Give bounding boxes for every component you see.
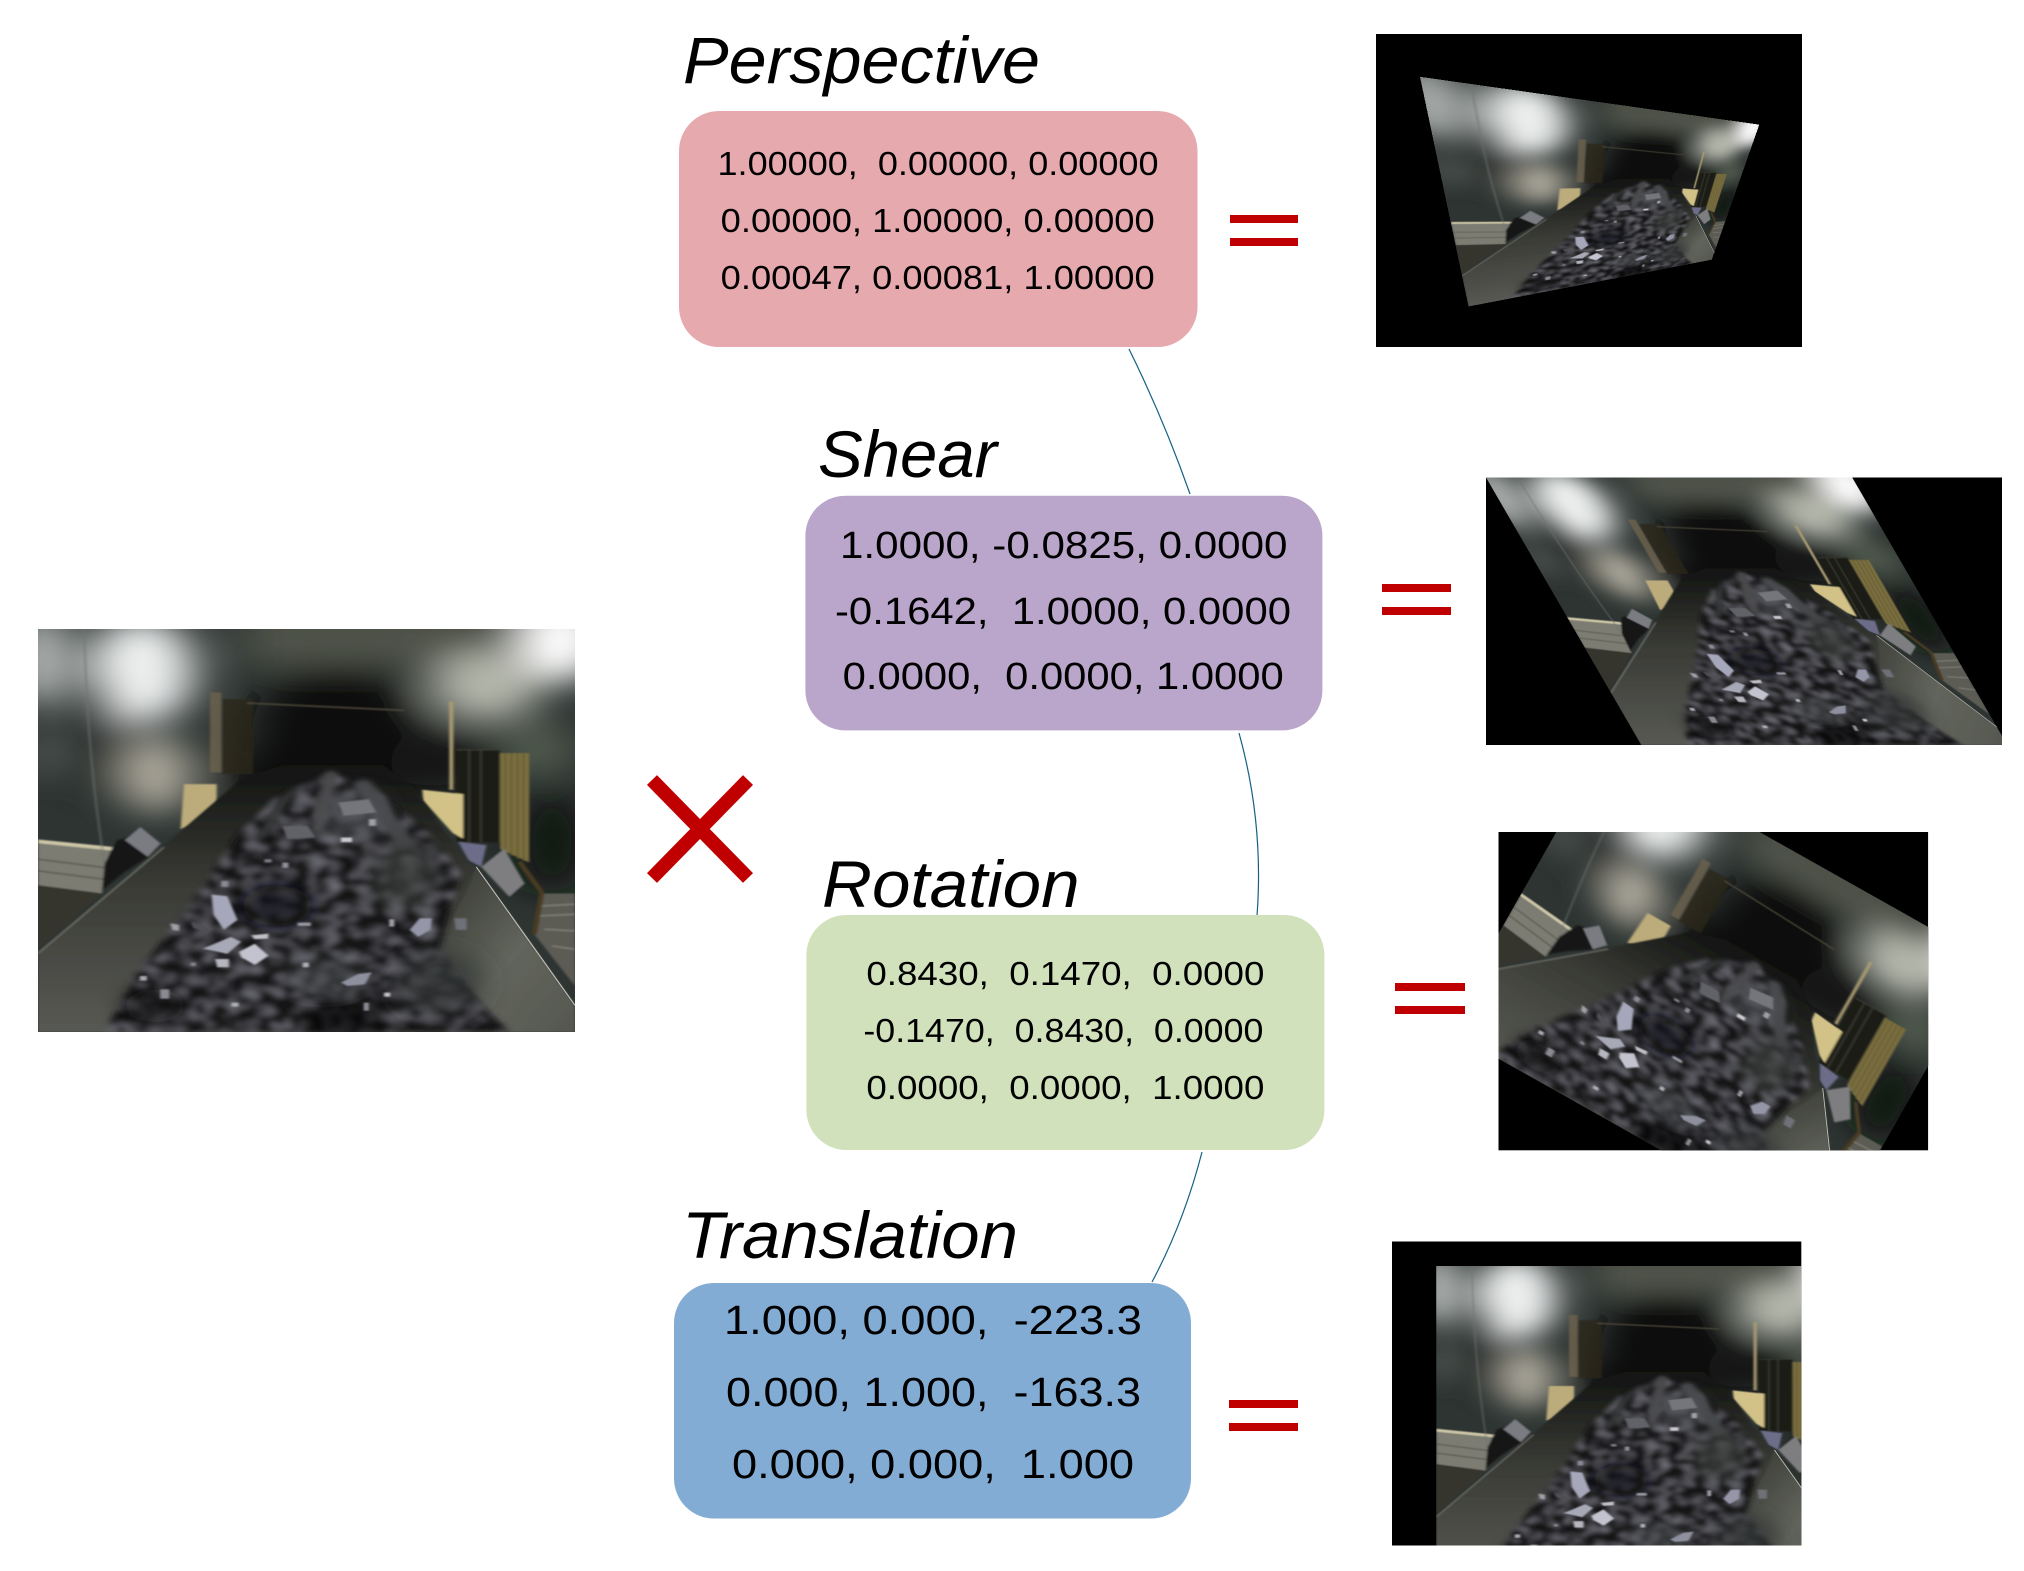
multiplication sign — [652, 780, 748, 878]
equals sign: translation — [1229, 1400, 1298, 1431]
panel: translation matrix: 0.000, 0.000, 1.000 — [732, 1441, 1134, 1487]
output image: rotation — [1498, 832, 1928, 1150]
panel: rotation matrix — [806, 915, 1324, 1150]
panel: rotation matrix: 0.8430, 0.1470, 0.0000 — [866, 955, 1264, 992]
panel: translation matrix — [674, 1283, 1191, 1518]
panel: translation matrix: 0.000, 1.000, -163.3 — [726, 1369, 1141, 1415]
connector: perspective to shear — [1129, 349, 1190, 494]
panel: rotation matrix: -0.1470, 0.8430, 0.0000 — [863, 1012, 1263, 1049]
heading: Rotation: Rotation — [822, 847, 1080, 921]
heading: Translation: Translation — [682, 1198, 1018, 1272]
panel: perspective matrix: 0.00000, 1.00000, 0.00000 — [721, 202, 1155, 239]
panel: shear matrix — [805, 496, 1322, 730]
equals sign: shear — [1382, 584, 1451, 615]
equals sign: rotation — [1395, 983, 1465, 1014]
panel: translation matrix: 1.000, 0.000, -223.3 — [724, 1297, 1142, 1343]
panel: rotation matrix: 0.0000, 0.0000, 1.0000 — [866, 1069, 1264, 1106]
connector: shear to rotation — [1239, 733, 1259, 916]
panel: shear matrix: -0.1642, 1.0000, 0.0000 — [835, 591, 1291, 633]
panel: shear matrix: 1.0000, -0.0825, 0.0000 — [840, 525, 1288, 567]
output image: perspective — [1376, 34, 1802, 347]
output image: shear — [1486, 478, 2002, 745]
equals sign: perspective — [1230, 215, 1298, 246]
panel: perspective matrix: 1.00000, 0.00000, 0.00000 — [718, 145, 1158, 182]
heading: Shear: Shear — [818, 417, 1000, 491]
heading: Perspective: Perspective — [683, 23, 1040, 97]
panel: perspective matrix — [679, 111, 1198, 347]
output image: translation — [1392, 1242, 1802, 1546]
panel: shear matrix: 0.0000, 0.0000, 1.0000 — [843, 656, 1284, 698]
panel: perspective matrix: 0.00047, 0.00081, 1.00000 — [721, 259, 1155, 296]
connector: rotation to translation — [1152, 1152, 1202, 1282]
source photo: conveyor belt with coal — [38, 629, 575, 1032]
